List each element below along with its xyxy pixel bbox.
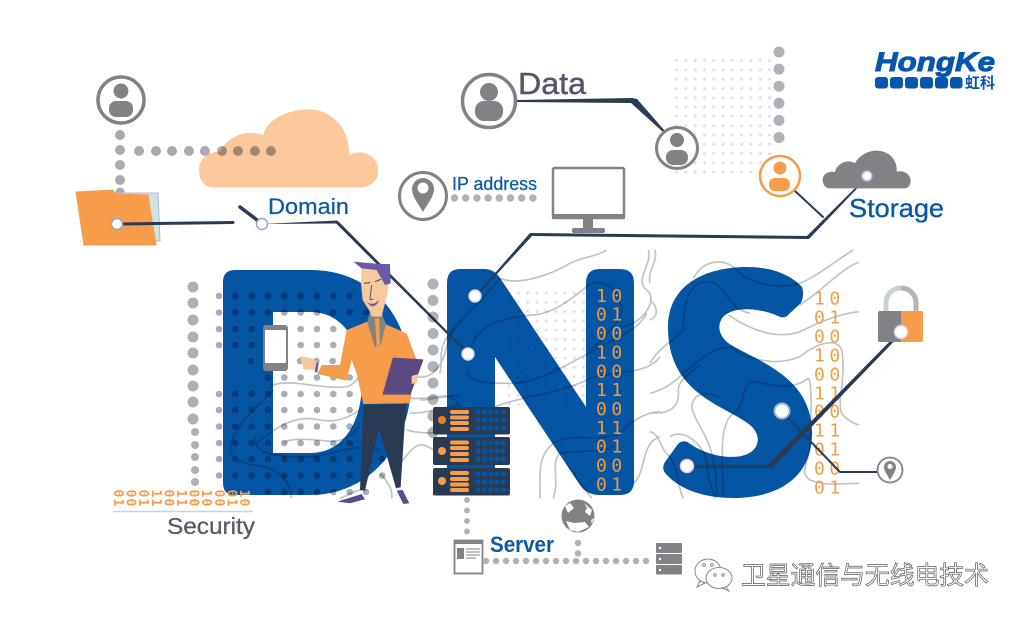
binary column on N: 01 — [596, 474, 627, 496]
phone — [263, 325, 288, 371]
icon: lock — [878, 288, 923, 342]
binary column on N: 01 — [596, 436, 627, 458]
binary column right of S: 01 — [814, 308, 845, 328]
binary column on N: 10 — [596, 342, 627, 364]
icon: folder — [76, 190, 160, 245]
label: Security: Security — [167, 513, 256, 539]
N connector nodes — [462, 290, 481, 360]
dotted column: left of D — [188, 282, 199, 486]
lilac dot field: across N — [508, 288, 588, 406]
binary column right of S: 10 — [814, 288, 845, 310]
binary column on N — [596, 286, 627, 496]
binary security strip: 00010101001 — [110, 490, 251, 498]
binary column right of S: 00 — [814, 326, 845, 348]
binary security strip: 10110100010 — [110, 498, 251, 506]
label: Server: Server — [490, 532, 554, 557]
connector: N to storage cloud — [475, 176, 868, 297]
connector: Data to person — [517, 98, 665, 132]
icon: globe — [562, 500, 594, 532]
binary column right of S: 11 — [814, 420, 845, 442]
watermark text: 卫星通信与无线电技术 — [741, 562, 989, 590]
icon: server stack — [656, 543, 682, 574]
dotted connector: IP address to monitor — [454, 194, 544, 202]
binary column right of S: 11 — [814, 384, 845, 404]
binary column on N: 00 — [596, 399, 627, 420]
connector: S to pin — [774, 404, 877, 472]
icon: person orange — [760, 156, 800, 196]
label: IP address: IP address — [452, 174, 537, 194]
logo: HongKe — [875, 47, 995, 92]
binary column right of S: 01 — [814, 440, 845, 460]
binary column on N: 01 — [596, 304, 627, 326]
contour lines — [230, 250, 859, 498]
connector: S to lock — [680, 331, 902, 472]
letter D — [223, 270, 411, 495]
binary column right of S — [814, 288, 845, 498]
icon: person Data — [462, 74, 516, 128]
icon: wechat watermark — [695, 559, 732, 591]
icon: location pin circle — [400, 172, 446, 220]
binary column right of S: 00 — [814, 458, 845, 480]
dotted column: top right — [774, 52, 784, 138]
label: Storage: Storage — [849, 193, 944, 223]
connector: folder to switch — [112, 207, 469, 355]
dot grid over D — [219, 296, 383, 492]
cloud: peach — [199, 109, 378, 187]
server rack — [433, 407, 510, 496]
binary column on N: 00 — [596, 324, 627, 344]
icon: document — [454, 540, 482, 574]
dotted column: between D and N — [428, 284, 438, 434]
binary security strip — [110, 490, 251, 506]
binary column right of S: 00 — [814, 402, 845, 422]
dotted connector: person to cloud — [115, 130, 276, 196]
binary column on N: 00 — [596, 362, 627, 382]
logo: HongKe: HongKe — [875, 47, 995, 77]
dotted connector: document to servers — [486, 558, 650, 564]
binary column right of S: 10 — [814, 346, 845, 366]
letter N — [447, 269, 634, 495]
icon: small pin circle — [878, 458, 902, 482]
label: Data: Data — [518, 66, 587, 101]
person illustration — [300, 262, 423, 504]
lilac dot field: top right — [674, 58, 774, 174]
binary column right of S: 01 — [814, 478, 845, 498]
icon: person small — [656, 128, 698, 168]
icon: person top left — [98, 77, 144, 123]
dotted connector: globe to line — [575, 543, 581, 556]
letter S — [663, 267, 812, 498]
binary column on N: 00 — [596, 456, 627, 476]
divider: security — [113, 510, 253, 512]
binary column on N: 11 — [596, 418, 627, 439]
icon: monitor — [552, 168, 625, 233]
dotted connector: rack to document — [464, 500, 470, 532]
label: Domain: Domain — [268, 194, 349, 219]
binary column right of S: 00 — [814, 364, 845, 386]
binary column on N: 10 — [596, 286, 627, 307]
binary column on N: 11 — [596, 380, 627, 401]
logo: HongKe: 虹科 — [965, 74, 995, 92]
icon: storage cloud — [823, 151, 911, 188]
